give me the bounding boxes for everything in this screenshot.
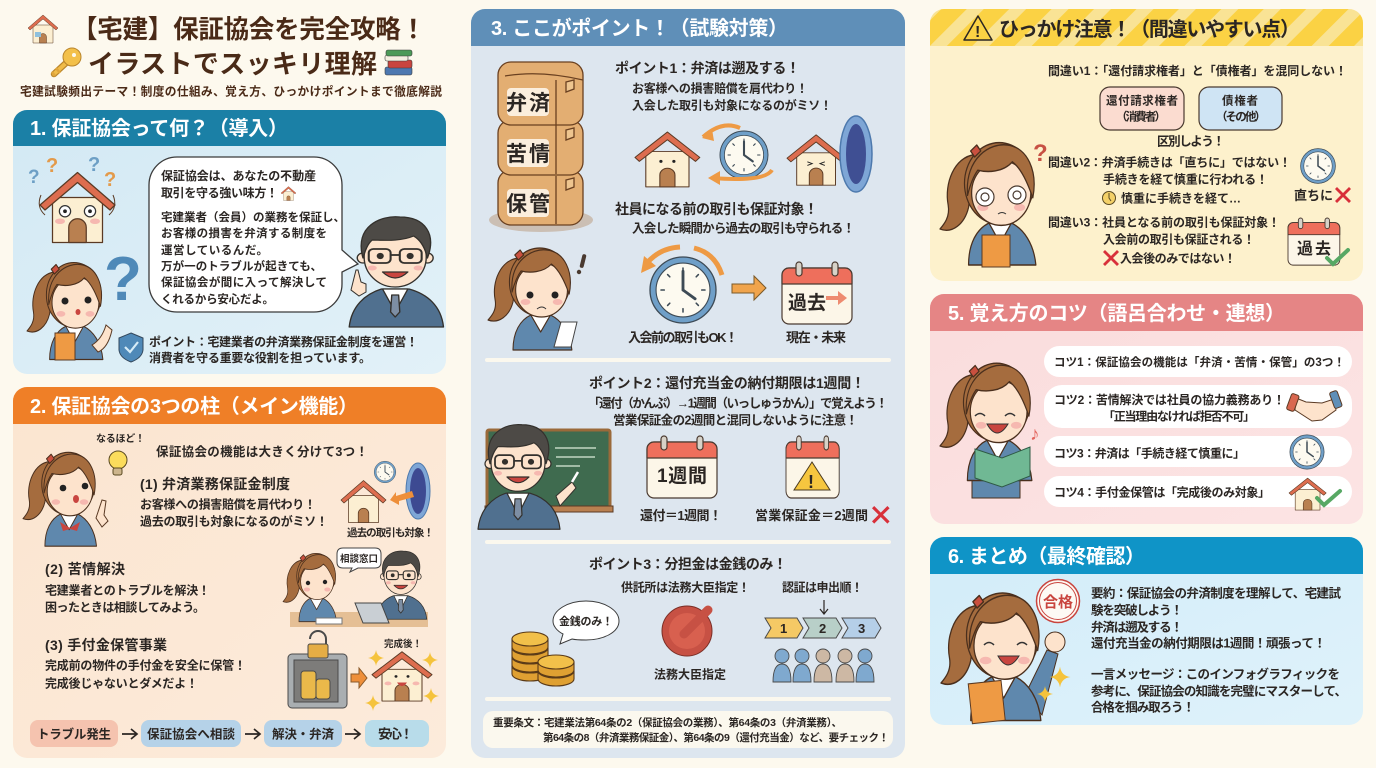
speech bubble: 保証協会は、あなたの不動産	[161, 168, 316, 183]
arrow: clock to calendar	[732, 276, 766, 300]
summary text: 弁済は遡及する！	[1091, 620, 1183, 634]
icon: calendar with check	[1288, 218, 1348, 265]
point 2 text: 「還付（かんぷ）→1週間（いっしゅうかん）」で覚えよう！	[588, 396, 888, 410]
captions	[640, 506, 890, 524]
one-line message: 一言メッセージ：このインフォグラフィックを	[1091, 666, 1340, 682]
captions: 入会前の取引もOK！	[628, 330, 738, 345]
icon: light bulb	[109, 451, 127, 475]
icon: calendar warning	[786, 436, 839, 498]
queue chevrons	[765, 618, 881, 638]
illustration: stacked boxes	[489, 62, 593, 232]
point 2 text: 営業保証金の2週間と混同しないように注意！	[613, 412, 858, 428]
illustration: stacked boxes: 保管	[506, 193, 550, 216]
icon: key	[52, 48, 81, 76]
point note	[149, 334, 418, 365]
speech bubble: くれるから安心だよ。	[161, 292, 274, 306]
function 1: 過去の取引も対象になるのがミソ！	[140, 514, 328, 528]
point note: 消費者を守る重要な役割を担っています。	[149, 350, 371, 365]
character: dizzy girl	[940, 143, 1036, 267]
mistake 2 text	[1048, 154, 1291, 206]
not immediately	[1294, 187, 1351, 203]
function 3: 完成前の物件の手付金を安全に保管！	[45, 658, 246, 672]
panel: 2 three pillars	[13, 387, 446, 758]
function 2: 困ったときは相談してみよう。	[45, 600, 205, 614]
box: claimant: （消費者）	[1116, 110, 1166, 124]
icon: worried house with question marks	[28, 154, 116, 242]
function 2	[45, 561, 210, 614]
step: trouble: トラブル発生	[37, 726, 111, 742]
caption: minister: 法務大臣指定	[654, 666, 726, 682]
speech bubble: money only	[553, 601, 619, 644]
panel: 6 summary	[930, 537, 1363, 725]
panel: 4 trap warnings	[930, 9, 1363, 281]
icon: worried house with question marks: ?	[104, 169, 116, 191]
speech bubble: 宅建業者（会員）の業務を保証し、	[161, 210, 345, 224]
icon: worried house with question marks: ?	[88, 154, 100, 176]
flow steps	[30, 720, 429, 747]
function 3: 完成後じゃないとダメだよ！	[45, 676, 198, 690]
icon: red cross	[872, 506, 890, 524]
illustration: big clock	[641, 247, 722, 323]
subtitle: 宅建試験頻出テーマ！制度の仕組み、覚え方、ひっかけポイントまで徹底解説	[20, 84, 442, 98]
subheading: before becoming member: 社員になる前の取引も保証対象！	[615, 201, 818, 217]
title line 2: イラストでスッキリ理解	[88, 49, 377, 79]
arrow	[122, 729, 137, 739]
icon: handshake	[1286, 390, 1342, 421]
tip 3: コツ3：弁済は「手続き経て慎重に」	[1054, 446, 1245, 460]
illustration: stacked boxes: 苦情	[506, 143, 550, 166]
label: distinguish: 区別しよう！	[1157, 134, 1225, 148]
section 5 header: 5. 覚え方のコツ（語呂合わせ・連想）	[948, 301, 1285, 325]
icon: warning triangle: !	[975, 24, 980, 41]
arrow	[345, 729, 360, 739]
illustration: consultation: 相談窓口	[340, 553, 378, 565]
character: girl with notepad	[488, 248, 587, 350]
mistake 2 text: 手続きを経て慎重に行われる！	[1103, 172, 1268, 186]
one-line message: 参考に、保証協会の知識を完璧にマスターして、	[1091, 684, 1347, 698]
subheading: before becoming member	[615, 201, 855, 236]
mistake 3 text	[1048, 214, 1280, 266]
point 1 text: お客様への損害賠償を肩代わり！	[632, 80, 808, 96]
function 2: 宅建業者とのトラブルを解決！	[45, 582, 210, 598]
icon: calendar warning: !	[808, 472, 814, 492]
box: creditor: （その他）	[1216, 110, 1266, 124]
icon: small house	[281, 186, 296, 200]
step: resolve	[264, 720, 342, 747]
speech bubble: 万が一のトラブルが起きても、	[161, 259, 322, 273]
illustration: completed house	[365, 650, 439, 711]
captions: 還付＝1週間！	[640, 508, 722, 523]
section 1 header: 1. 保証協会って何？（導入）	[30, 116, 288, 140]
icon: small clock	[1102, 192, 1116, 204]
key articles note	[483, 711, 893, 748]
title block	[20, 15, 442, 98]
tip 2	[1044, 385, 1352, 428]
point 2 text: ポイント2：還付充当金の納付期限は1週間！	[589, 375, 865, 391]
captions	[628, 330, 846, 345]
tip 1: コツ1：保証協会の機能は「弁済・苦情・保管」の3つ！	[1054, 355, 1345, 369]
icon: red cross	[1103, 250, 1119, 266]
icon: big question mark: ?	[104, 245, 142, 314]
illustration: house and time portal	[787, 116, 872, 192]
speech bubble: お客様の損害を弁済する制度を	[161, 226, 327, 240]
icon: clock	[1290, 435, 1324, 469]
illustration: teacher at blackboard	[478, 425, 613, 529]
section 6 header: 6. まとめ（最終確認）	[948, 545, 1145, 568]
queue chevrons: 2	[819, 621, 826, 636]
function 3	[45, 637, 246, 690]
function 1: (1) 弁済業務保証金制度	[140, 476, 290, 492]
arrow	[245, 729, 260, 739]
function 1	[140, 476, 328, 528]
step: safe: 安心！	[378, 726, 413, 742]
section 2 header: 2. 保証協会の3つの柱（メイン機能）	[30, 395, 358, 418]
icon: shield check	[119, 333, 143, 362]
arrow: safe to house	[351, 668, 367, 688]
point 1 text: ポイント1：弁済は遡及する！	[615, 60, 800, 76]
queue chevrons: 1	[780, 621, 787, 636]
section 2 header	[13, 387, 446, 424]
mistake 2 text: 慎重に手続きを経て…	[1121, 190, 1241, 206]
icon: house emoji	[28, 15, 58, 43]
step: consult	[141, 720, 241, 747]
illustration: safe with coins	[288, 631, 347, 708]
box: claimant: 還付請求権者	[1106, 94, 1178, 108]
speech bubble: money only: 金銭のみ！	[559, 614, 613, 628]
mistake 3 text: 入会前の取引も保証される！	[1103, 232, 1255, 246]
step: consult: 保証協会へ相談	[147, 726, 235, 742]
icon: books	[385, 50, 412, 75]
intro text: 保証協会の機能は大きく分けて3つ！	[156, 444, 368, 459]
section 3 header	[471, 9, 905, 46]
tip 2: 「正当理由なければ拒否不可」	[1103, 408, 1255, 424]
mistake 1 heading: 間違い1：「還付請求権者」と「債権者」を混同しない！	[1048, 63, 1347, 78]
function 2: (2) 苦情解決	[45, 561, 125, 577]
icon: clock	[1301, 149, 1335, 183]
stamp: passed	[1036, 580, 1080, 622]
caption: past trades: 過去の取引も対象！	[347, 526, 434, 539]
illustration: consultation	[283, 548, 428, 627]
speech bubble: 保証協会が間に入って解決して	[161, 275, 327, 289]
illustration: house, clock, portal	[341, 461, 430, 522]
queue chevrons: 3	[858, 621, 865, 636]
key articles note: 第64条の8（弁済業務保証金）、第64条の9（還付充当金）など、要チェック！	[543, 731, 889, 744]
function 1: お客様への損害賠償を肩代わり！	[140, 496, 316, 512]
box: creditor	[1199, 87, 1282, 130]
section 1 header	[13, 110, 446, 146]
function 3: (3) 手付金保管事業	[45, 637, 167, 653]
mistake 3 text: 間違い3：社員となる前の取引も保証対象！	[1048, 214, 1280, 230]
icon: calendar past	[782, 262, 852, 324]
step: trouble	[30, 720, 118, 747]
title line 1: 【宅建】保証協会を完全攻略！	[72, 16, 426, 44]
subheadings: 供託所は法務大臣指定！	[621, 580, 750, 594]
section 3 header: 3. ここがポイント！（試験対策）	[491, 16, 788, 40]
point 3 heading: ポイント3：分担金は金銭のみ！	[589, 556, 787, 572]
icon: worried house with question marks: ?	[28, 167, 40, 188]
section 4 header: ひっかけ注意！（間違いやすい点）	[999, 18, 1300, 41]
character: cheering girl	[941, 593, 1070, 724]
mistake 3 text: 入会後のみではない！	[1120, 250, 1236, 266]
people in line	[773, 649, 874, 682]
icon: house with check	[1289, 478, 1340, 510]
one-line message	[1091, 666, 1347, 714]
section 5 header	[930, 294, 1363, 331]
character: puzzled girl	[27, 263, 112, 360]
tip 3	[1044, 435, 1352, 469]
point 1 text: 入会した取引も対象になるのがミソ！	[632, 98, 832, 112]
tip 2: コツ2：苦情解決では社員の協力義務あり！	[1054, 392, 1285, 407]
label: naruhodo: なるほど！	[96, 432, 145, 445]
speech bubble: 運営しているんだ。	[161, 243, 268, 257]
icon: question mark: ?	[1033, 140, 1048, 167]
captions: 営業保証金＝2週間	[755, 508, 868, 523]
step: resolve: 解決・弁済	[272, 726, 334, 742]
icon: music note: ♪	[1030, 424, 1040, 445]
stamp: passed: 合格	[1043, 593, 1073, 611]
icon: calendar past: 過去	[788, 292, 826, 314]
step: safe	[365, 720, 429, 747]
icon: calendar one week	[647, 436, 717, 498]
illustration: house and clock retroactive	[635, 125, 772, 187]
summary text: 還付充当金の納付期限は1週間！頑張って！	[1091, 636, 1326, 650]
captions: 現在・未来	[786, 330, 846, 345]
box: creditor: 債権者	[1222, 94, 1258, 108]
subheadings: 認証は申出順！	[782, 580, 863, 594]
icon: warning triangle	[964, 16, 992, 41]
illustration: stacked boxes: 弁済	[506, 92, 550, 115]
summary text: 要約：保証協会の弁済制度を理解して、宅建試	[1091, 586, 1341, 600]
icon: calendar with check: 過去	[1297, 239, 1331, 258]
panel: 3 key points	[471, 9, 905, 758]
key articles note: 重要条文：宅建業法第64条の2（保証協会の業務）、第64条の3（弁済業務）、	[493, 716, 842, 729]
icon: red seal	[662, 606, 712, 656]
speech bubble	[149, 157, 358, 312]
label: after completion: 完成後！	[384, 638, 422, 650]
subheadings	[621, 580, 863, 594]
mistake 2 text: 間違い2：弁済手続きは「直ちに」ではない！	[1048, 154, 1291, 170]
panel: 1 what is the guarantee association	[13, 110, 446, 374]
tip 1	[1044, 346, 1352, 377]
summary text: 験を突破しよう！	[1091, 602, 1183, 618]
section 6 header	[930, 537, 1363, 574]
summary text	[1091, 586, 1341, 650]
point note: ポイント：宅建業者の弁済業務保証金制度を運営！	[149, 334, 418, 349]
point 2 text	[588, 375, 888, 428]
tip 4	[1044, 476, 1352, 510]
icon: calendar one week: 1週間	[657, 465, 707, 487]
character: girl with idea	[23, 452, 108, 546]
point 1 text	[615, 60, 832, 112]
icon: worried house with question marks: ?	[46, 155, 58, 177]
subheading: before becoming member: 入会した瞬間から過去の取引も守られる！	[632, 220, 855, 236]
tip 4: コツ4：手付金保管は「完成後のみ対象」	[1054, 484, 1270, 500]
character: girl reading	[940, 363, 1032, 498]
box: claimant	[1100, 87, 1184, 130]
arrow: down	[820, 600, 828, 614]
one-line message: 合格を掴み取ろう！	[1091, 700, 1195, 714]
icon: coins	[512, 632, 574, 686]
section 4 header	[930, 9, 1363, 46]
panel: 5 memory tips	[930, 294, 1363, 524]
not immediately: 直ちに	[1294, 188, 1333, 203]
speech bubble: 取引を守る強い味方！	[161, 185, 278, 200]
character: explaining man	[349, 217, 444, 327]
